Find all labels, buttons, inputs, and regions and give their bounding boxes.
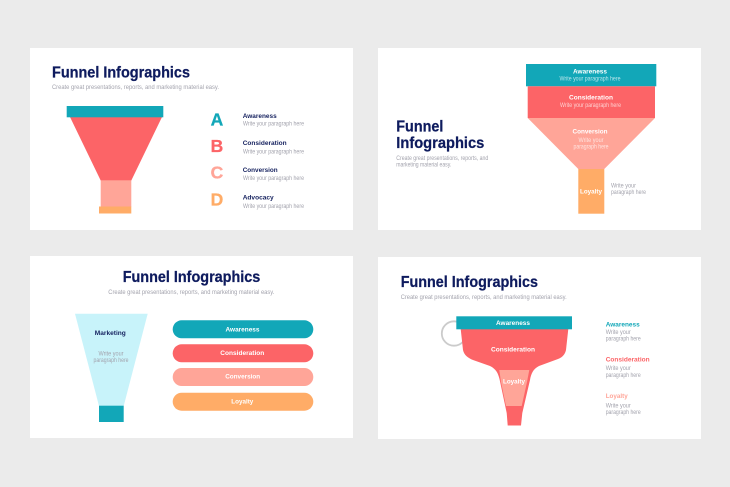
legend: Consideration: Write your [606,365,631,372]
funnel stage: Consideration [528,86,655,118]
item D: Advocacy: Write your paragraph here [243,203,304,210]
pill: Awareness: Awareness [226,327,260,334]
item A: Awareness: Write your paragraph here [243,121,304,128]
item D: Advocacy [211,189,304,210]
legend: Loyalty: Loyalty [606,393,628,400]
legend: Awareness: Write your [606,329,631,336]
item A: Awareness [211,109,304,129]
item B: Consideration: Write your paragraph here [243,149,304,156]
side note [611,182,646,196]
item C: Conversion: C [211,163,224,183]
item B: Consideration: Consideration [243,140,287,147]
title: Funnel Infographics [123,269,260,286]
legend: Consideration: paragraph here [606,372,641,379]
subtitle: marketing material easy. [396,162,451,169]
funnel stage: Awareness: Write your paragraph here [560,76,621,83]
title [396,118,484,152]
subtitle [396,155,489,169]
legend: Loyalty: Write your [606,402,631,409]
title: Infographics [396,135,484,152]
pill: Awareness [173,320,313,338]
pill: Consideration [173,344,313,362]
funnel diagram [67,106,163,214]
item D: Advocacy: Advocacy [243,195,274,202]
panel: marketing funnel slide [30,256,353,438]
funnel stage: Conversion [528,118,655,169]
item C: Conversion: Conversion [243,167,278,174]
item A: Awareness: Awareness [243,113,277,120]
funnel stage: Loyalty: Loyalty [580,188,602,195]
funnel: Marketing: Write your [98,350,124,357]
subtitle: Create great presentations, reports, and marketing material easy. [52,84,219,91]
item A: Awareness: A [211,109,224,129]
subtitle: Create great presentations, reports, and marketing material easy. [401,294,567,301]
title: Funnel [396,118,443,136]
funnel stage: Conversion: paragraph here [574,144,609,150]
title: Funnel Infographics [401,274,538,291]
subtitle: Create great presentations, reports, and [396,155,489,162]
funnel stage: Consideration: Consideration [569,94,613,101]
funnel stage: Loyalty [578,169,604,214]
funnel stage: Conversion: Conversion [572,128,608,135]
funnel stage: Awareness [526,64,656,86]
item B: Consideration [211,136,304,156]
funnel: Marketing: paragraph here [94,357,129,364]
funnel stage: Consideration: Write your paragraph here [560,102,621,109]
item C: Conversion [211,163,304,183]
pill: Loyalty: Loyalty [231,399,254,406]
item D: Advocacy: D [211,189,223,209]
curved funnel: Loyalty [503,379,525,386]
curved funnel [456,316,572,426]
legend: Loyalty [606,393,641,416]
legend: Awareness [606,321,641,342]
legend: Loyalty: paragraph here [606,409,641,416]
panel: stacked funnel slide [378,48,701,230]
legend: Awareness: paragraph here [606,335,641,342]
icon: gray ring [442,321,466,346]
side note: Write your [611,182,636,189]
legend: Consideration: Consideration [606,356,650,363]
panel: curved funnel slide [378,257,701,439]
side note: paragraph here [611,189,646,196]
subtitle: Create great presentations, reports, and marketing material easy. [108,289,274,296]
title: Funnel Infographics [52,65,190,82]
funnel: Marketing [75,314,148,422]
item C: Conversion: Write your paragraph here [243,175,304,182]
pill: Conversion [173,368,313,386]
pill: Conversion: Conversion [225,374,260,380]
curved funnel: Awareness [496,320,530,327]
pill: Loyalty [173,393,313,411]
funnel: Marketing: Marketing [95,330,126,337]
item B: Consideration: B [211,136,223,156]
legend: Consideration [606,356,650,379]
funnel stage: Conversion: Write your [578,137,604,144]
funnel stage: Awareness: Awareness [573,69,607,76]
curved funnel: Consideration [491,346,535,353]
panel: letter funnel slide [30,48,353,230]
pill: Consideration: Consideration [220,350,264,357]
legend: Awareness: Awareness [606,321,640,328]
